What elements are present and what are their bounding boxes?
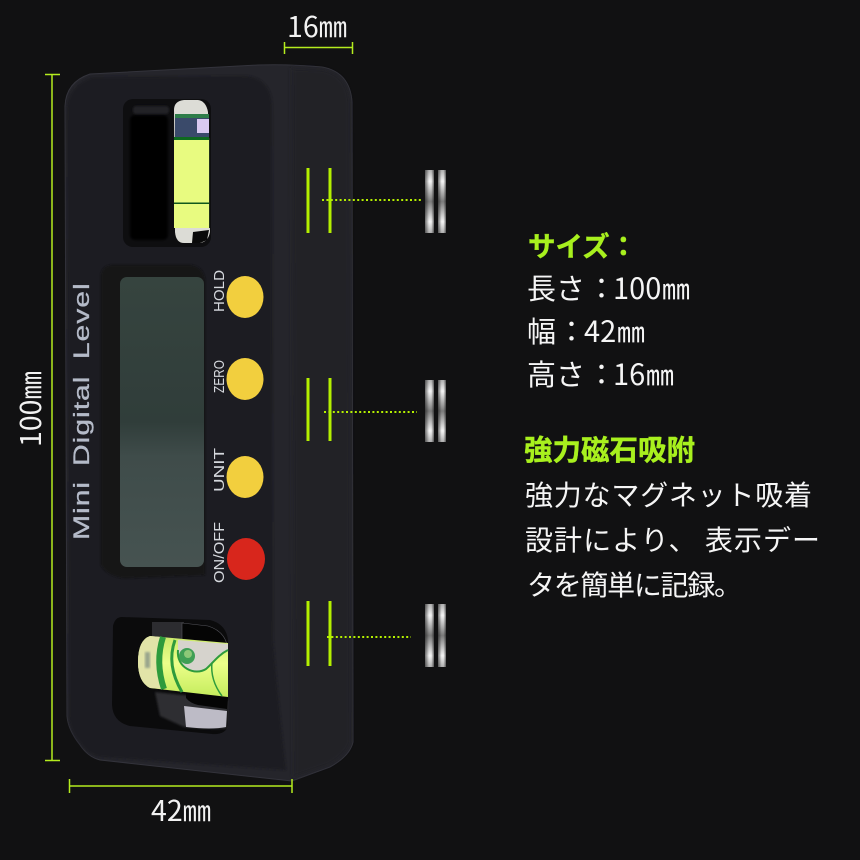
dimension: width 42 mm [69,779,292,830]
length: 長さ [527,266,585,308]
top vial [174,100,210,243]
device side and chamfer [65,65,353,781]
device: digital level body [65,65,353,781]
LCD screen [120,277,204,567]
height: 16 [613,352,645,394]
magnet callout: middle [308,378,446,442]
device front face [67,76,286,770]
height: ㎜ [646,354,674,394]
description line 2: 設計により、 表示デー [525,519,820,559]
length: ㎜ [662,268,690,308]
width: ㎜ [617,311,645,351]
bottom vial [138,636,228,697]
dimension: width 42 mm: 42㎜ [151,789,211,830]
heading: size: サイズ： [528,224,637,264]
button label: HOLD: HOLD [211,270,228,312]
magnet callout: top [308,168,446,233]
button: HOLD [226,276,264,318]
text block: magnet [524,428,820,604]
text block: size [527,224,690,394]
length: 100 [613,266,661,308]
product name: Level [69,282,94,359]
product name: Digital [69,376,94,466]
dimension: height 16 mm: 16㎜ [287,5,347,46]
product name: Mini [69,481,94,540]
button: ZERO [226,358,264,400]
dimension: length 100 mm [9,74,60,761]
length: ： [587,266,616,308]
width: ： [557,309,586,351]
dimension: length 100 mm: 100㎜ [9,371,50,447]
top vial window [123,99,211,247]
bottom vial window [112,617,228,734]
description line 3: タを簡単に記録。 [527,564,742,604]
button label: ZERO: ZERO [211,360,228,393]
device side panel shade [292,68,351,777]
width: 幅 [527,309,556,351]
button label: ON/OFF: ON/OFF [211,522,228,583]
height: ： [587,352,616,394]
heading: strong magnet: 強力磁石吸附 [524,428,695,469]
LCD bezel [101,265,205,578]
button label: UNIT: UNIT [211,448,228,492]
magnet callout: bottom [308,601,446,667]
bubble [178,640,228,672]
button: UNIT [226,456,264,498]
description line 1: 強力なマグネット吸着 [525,474,812,514]
width: 42 [584,309,616,351]
button: ON/OFF [227,538,265,580]
height: 高さ [527,352,585,394]
